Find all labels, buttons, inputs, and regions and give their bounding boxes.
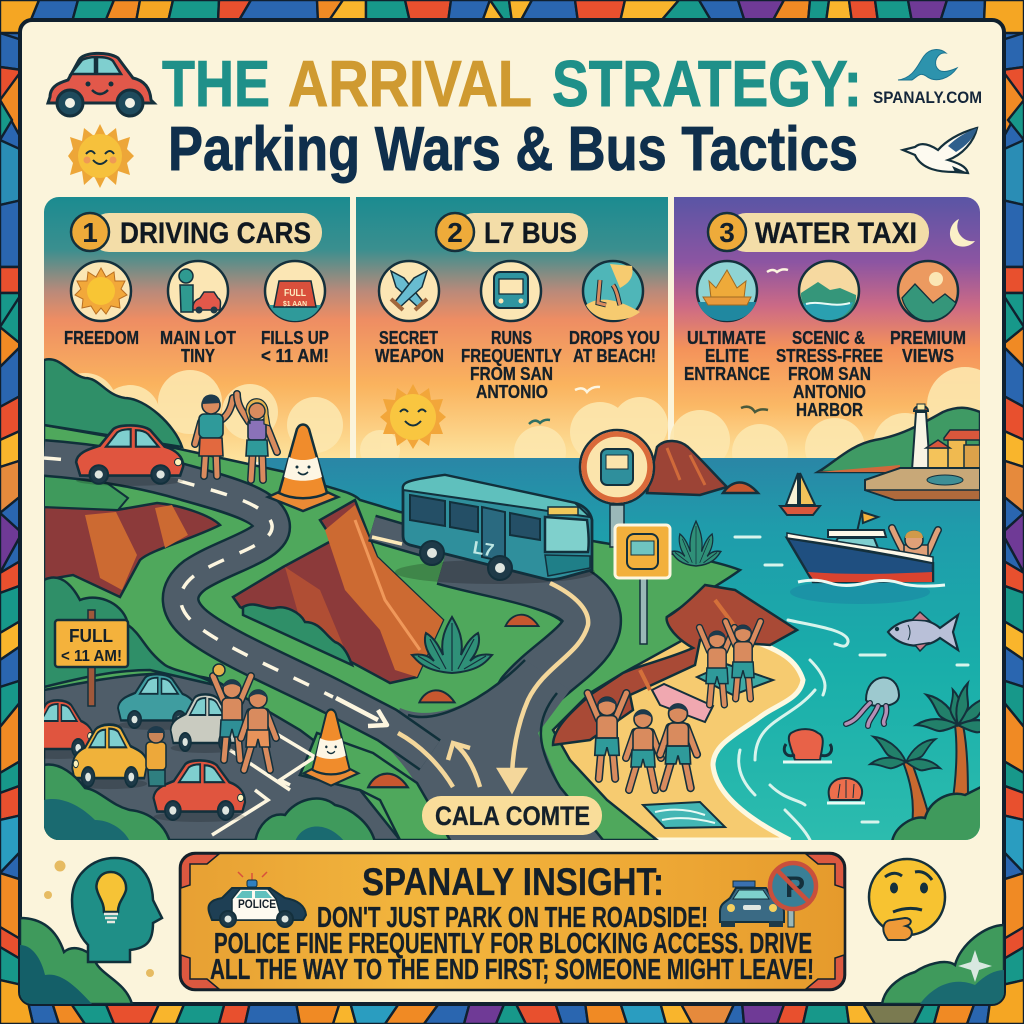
icon: police car front and no parking sign	[720, 863, 816, 927]
labels: L7 bus: AT BEACH!	[573, 346, 656, 366]
birds in sky	[529, 269, 788, 424]
labels: driving cars: MAIN LOT	[160, 328, 236, 348]
road arrow	[336, 698, 387, 726]
labels: L7 bus: RUNS	[491, 328, 532, 348]
labels: water taxi: FROM SAN	[788, 364, 871, 384]
labels: driving cars: TINY	[181, 346, 215, 366]
insight text: DON'T JUST PARK ON THE ROADSIDE!	[317, 902, 708, 934]
main illustrated scene	[21, 197, 1003, 842]
person by yellow car	[146, 726, 166, 786]
parking lot	[44, 674, 400, 840]
icon: sky sun	[380, 384, 446, 449]
bottom center scene bush	[255, 798, 375, 842]
icon: full lot sign	[265, 261, 325, 321]
walking beachgoers	[588, 693, 697, 790]
icon: police car side: POLICE	[238, 899, 276, 911]
road: bus road	[372, 528, 592, 730]
icon: seagull	[903, 128, 977, 173]
sailboat	[780, 473, 820, 515]
labels: water taxi: PREMIUM	[890, 328, 966, 348]
icon: thinking face emoji	[869, 859, 945, 940]
hill bush behind road	[44, 359, 182, 447]
heading: 1 driving cars	[71, 213, 322, 252]
panel: water taxi sky	[674, 197, 980, 462]
L7 bus	[395, 475, 595, 584]
labels: water taxi: VIEWS	[902, 346, 954, 366]
icon: crown boat	[697, 261, 757, 321]
label: Cala Comte: CALA COMTE	[435, 801, 590, 831]
water taxi boat with waving person	[787, 510, 945, 604]
heading: 1 driving cars: 1	[82, 217, 98, 248]
round bus stop sign	[580, 430, 654, 547]
center cliff	[233, 500, 443, 683]
labels: water taxi: SCENIC &	[792, 328, 865, 348]
bottom left bush and dots	[20, 860, 154, 1004]
icon: head with lightbulb	[72, 858, 162, 962]
labels: L7 bus: SECRET	[379, 328, 438, 348]
beach towels	[643, 664, 773, 828]
group of arguing people	[213, 664, 276, 770]
sign: FULL < 11 AM: < 11 AM!	[61, 648, 122, 665]
icon: police car front and no parking sign: P	[785, 871, 805, 904]
icon: drops at beach	[583, 261, 643, 321]
label: Cala Comte	[422, 796, 602, 835]
green ledge over left cliff	[45, 477, 130, 509]
logo: wave and SPANALY.COM: SPANALY.COM	[873, 88, 982, 107]
bus stop agave	[671, 521, 721, 566]
tan route arrows	[398, 583, 588, 790]
icon: police car side	[208, 872, 306, 927]
clouds	[78, 367, 980, 458]
couple waving	[195, 394, 277, 480]
left cliff	[44, 503, 220, 597]
sign: FULL < 11 AM	[55, 610, 128, 706]
title: Parking Wars & Bus Tactics	[168, 115, 858, 184]
labels: water taxi: STRESS-FREE	[776, 346, 883, 366]
sea	[262, 458, 980, 840]
center bush	[243, 604, 352, 665]
insight text	[210, 861, 814, 986]
bottom right scene bush	[892, 785, 985, 842]
labels: driving cars: < 11 AM!	[261, 346, 329, 366]
seashell	[827, 778, 865, 803]
parked cars	[21, 674, 245, 822]
square bus stop sign	[615, 525, 670, 644]
labels: water taxi: ANTONIO	[793, 382, 866, 402]
sign: FULL < 11 AM: FULL	[69, 626, 113, 646]
title	[162, 47, 862, 184]
harbor with lighthouse	[818, 404, 980, 500]
labels: L7 bus: WEAPON	[375, 346, 444, 366]
beach	[554, 641, 806, 840]
L7 bus: L7	[471, 537, 495, 561]
heading: 3 water taxi: 3	[719, 217, 735, 248]
green island by cone	[300, 733, 450, 840]
labels: water taxi: ELITE	[705, 346, 749, 366]
parking lines	[211, 732, 315, 836]
labels: driving cars: FILLS UP	[261, 328, 329, 348]
icon: premium views	[898, 261, 958, 321]
panel: L7 bus sky	[356, 197, 668, 462]
red car on road	[76, 425, 183, 486]
octopus	[783, 729, 832, 762]
callout: Spanaly insight	[180, 853, 845, 990]
heading: 2 L7 bus: 2	[447, 217, 463, 248]
heading: 3 water taxi	[708, 213, 929, 252]
road plaza	[385, 660, 603, 840]
icon: scenic waves	[799, 261, 859, 321]
icon: smiling red car	[48, 53, 154, 116]
labels: water taxi: ULTIMATE	[687, 328, 766, 348]
labels: L7 bus	[375, 328, 660, 402]
heading: 2 L7 bus: L7 BUS	[484, 217, 577, 250]
icon: full lot sign: FULL	[284, 288, 306, 299]
cone lower	[304, 709, 358, 786]
icon: main lot person and car	[168, 261, 228, 321]
title: THE	[162, 47, 270, 120]
beach cliff	[553, 585, 797, 745]
labels: water taxi: ENTRANCE	[684, 364, 770, 384]
land	[44, 425, 740, 840]
left mid bush	[44, 578, 215, 687]
bottom right bush	[882, 925, 1004, 1004]
title: STRATEGY:	[552, 47, 862, 120]
heading: 3 water taxi: WATER TAXI	[755, 217, 917, 250]
bottom left scene bush	[44, 765, 170, 842]
icon: bus	[481, 261, 541, 321]
labels: driving cars: FREEDOM	[64, 328, 139, 348]
title: ARRIVAL	[288, 47, 532, 120]
icon: moon	[950, 219, 975, 247]
sea rock headland	[647, 441, 758, 495]
labels: L7 bus: FREQUENTLY	[461, 346, 562, 366]
sea ripples	[735, 537, 968, 840]
icon: crossed swords	[379, 261, 439, 321]
panel: driving cars sky	[44, 197, 350, 462]
labels: L7 bus: FROM SAN	[470, 364, 553, 384]
palm trees	[869, 683, 1001, 825]
logo: wave and SPANALY.COM	[873, 50, 982, 107]
icon: smiling sun	[68, 124, 134, 188]
fish	[888, 612, 958, 651]
striped beach mat	[652, 684, 713, 722]
insight text: SPANALY INSIGHT:	[362, 861, 664, 904]
beachgoers on towel	[700, 622, 760, 705]
labels: water taxi: HARBOR	[796, 400, 863, 420]
labels: water taxi	[684, 328, 966, 420]
cone upper	[268, 424, 338, 511]
callout corners	[181, 854, 844, 989]
icon: freedom sun	[71, 261, 131, 321]
rocks	[368, 615, 538, 787]
heading: 2 L7 bus	[436, 213, 588, 252]
main winding road	[44, 458, 430, 755]
labels: driving cars	[64, 328, 329, 366]
center agave	[412, 617, 492, 673]
labels: L7 bus: DROPS YOU	[569, 328, 660, 348]
labels: L7 bus: ANTONIO	[476, 382, 548, 402]
jellyfish	[846, 678, 899, 726]
heading: 1 driving cars: DRIVING CARS	[120, 217, 311, 250]
icon: full lot sign: $1 AAN	[283, 301, 307, 308]
